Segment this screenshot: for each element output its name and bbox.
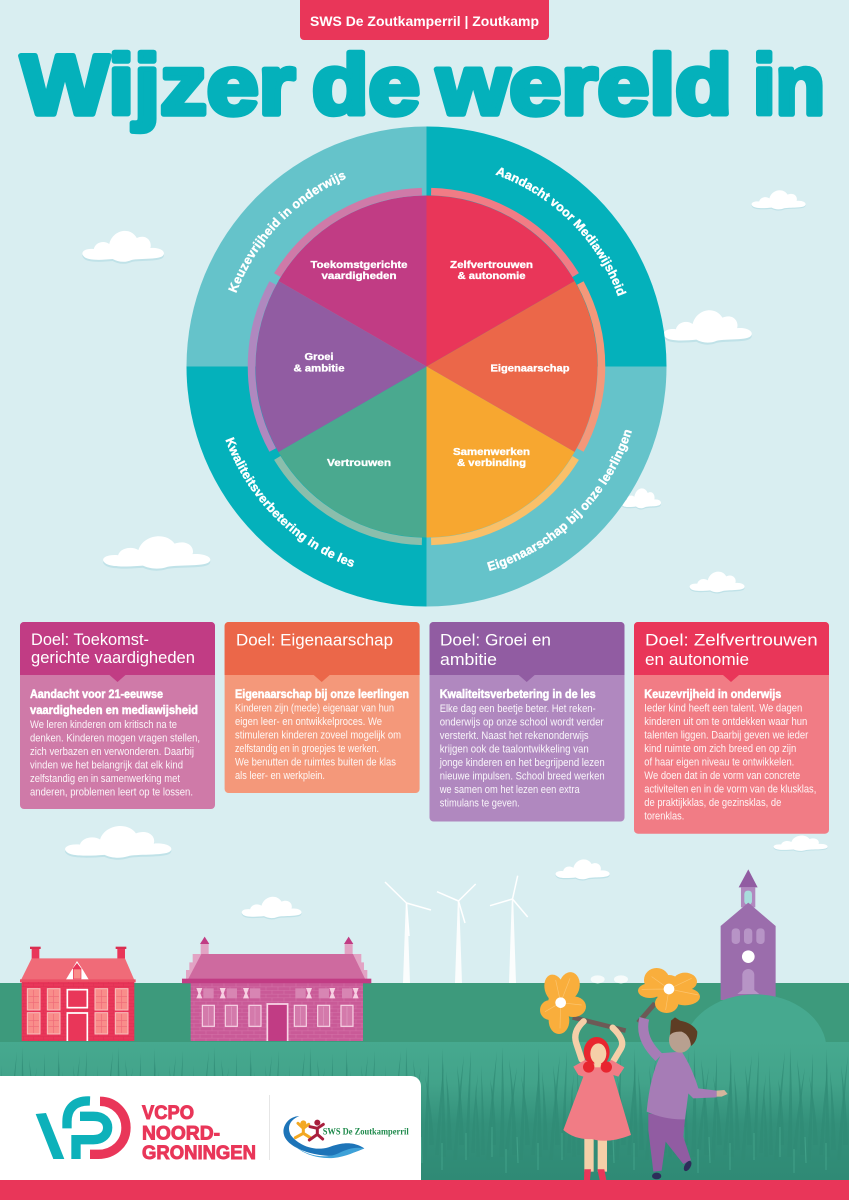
- card: Zelfvertrouwen en autonomie: Keuzevrijheid in onderwijs: [644, 689, 781, 701]
- foreground field with grass: [0, 1042, 849, 1180]
- card: Toekomstgerichte vaardigheden: Doel: Toekomst-: [31, 631, 149, 649]
- logo: VCPO Noord-Groningen: [36, 1101, 256, 1164]
- segment: Groei & ambitie: Groei: [304, 351, 334, 363]
- logo: SWS De Zoutkamperril: [283, 1116, 409, 1158]
- clouds: [65, 190, 828, 919]
- outer ring: Kwaliteitsverbetering in de les: [186, 366, 426, 606]
- outer ring: Aandacht voor Mediawijsheid: [426, 126, 666, 366]
- card: Zelfvertrouwen en autonomie: kinderen uit om te ontdekken waar hun: [644, 716, 807, 728]
- logo: VCPO Noord-Groningen: VCPO: [142, 1103, 194, 1124]
- segment: Eigenaarschap: Eigenaarschap: [490, 362, 570, 374]
- card: Groei en ambitie: Kwaliteitsverbetering in de les: [440, 689, 596, 701]
- back land: [0, 983, 849, 1045]
- outer ring: Aandacht voor Mediawijsheid: Aandacht voor Mediawijsheid: [495, 167, 627, 296]
- card: Groei en ambitie: we samen om het lezen een extra: [439, 784, 580, 796]
- card: Eigenaarschap: [225, 622, 420, 793]
- card: Zelfvertrouwen en autonomie: We doen dat in de vorm van concrete: [644, 770, 800, 782]
- segment: Zelfvertrouwen: Zelfvertrouwen: [450, 259, 533, 271]
- card: Toekomstgerichte vaardigheden: zich verbazen en verwonderen. Daarbij: [30, 746, 194, 758]
- card: Zelfvertrouwen en autonomie: [634, 622, 829, 834]
- card: Groei en ambitie: nieuwe impulsen. School breed werken: [440, 770, 605, 782]
- white logo panel: [0, 1076, 421, 1180]
- segment: Eigenaarschap: [426, 281, 602, 452]
- outer ring: Keuzevrijheid in onderwijs: Keuzevrijheid in onderwijs: [228, 172, 346, 293]
- outer ring: Eigenaarschap bij onze leerlingen: Eigenaarschap bij onze leerlingen: [487, 430, 632, 572]
- logo: SWS De Zoutkamperril: SWS De Zoutkamperril: [323, 1126, 409, 1136]
- title: wereld: [436, 38, 732, 132]
- card: Zelfvertrouwen en autonomie: en autonomie: [645, 651, 749, 669]
- card: Groei en ambitie: onderwijs op onze school wordt verder: [440, 716, 604, 728]
- card: Toekomstgerichte vaardigheden: [20, 622, 215, 809]
- wind turbines: [385, 876, 528, 983]
- logo: VCPO Noord-Groningen: NOORD-: [142, 1123, 220, 1144]
- red manor house: [20, 947, 136, 1041]
- segment: Vertrouwen: [277, 366, 426, 541]
- top label: SWS De Zoutkamperril | Zoutkamp: [310, 13, 539, 29]
- segment: Toekomstgerichte vaardigheden: vaardigheden: [322, 270, 396, 282]
- segment: Vertrouwen: Vertrouwen: [327, 457, 391, 469]
- card: Groei en ambitie: [430, 622, 624, 822]
- segment: Groei & ambitie: [251, 281, 426, 452]
- card: Groei en ambitie: krijgen ook de taalontwikkeling van: [440, 744, 589, 756]
- children holding flowers: [540, 968, 728, 1180]
- card: Groei en ambitie: ambitie: [440, 651, 497, 669]
- church on a hill: [683, 869, 827, 1106]
- title: in: [753, 38, 825, 132]
- card: Toekomstgerichte vaardigheden: vinden we het belangrijk dat elk kind: [30, 760, 183, 772]
- card: Eigenaarschap: zelfstandig en in groepjes te werken.: [235, 743, 379, 755]
- card: Zelfvertrouwen en autonomie: Doel: Zelfvertrouwen: [645, 632, 818, 650]
- title: de: [312, 38, 420, 132]
- card: Eigenaarschap: stimuleren kinderen zoveel mogelijk om: [235, 730, 401, 742]
- boy with flower: [638, 968, 728, 1179]
- card: Eigenaarschap: eigen leer- en ontwikkelproces. We: [235, 716, 382, 728]
- segment: Groei & ambitie: & ambitie: [294, 362, 345, 374]
- card: Groei en ambitie: stimulans te geven.: [440, 798, 520, 810]
- card: Toekomstgerichte vaardigheden: vaardigheden en mediawijsheid: [30, 705, 198, 717]
- card: Groei en ambitie: jonge kinderen en het begrijpend lezen: [439, 757, 605, 769]
- card: Toekomstgerichte vaardigheden: gerichte vaardigheden: [31, 649, 195, 667]
- card: Groei en ambitie: Elke dag een beetje beter. Het reken-: [440, 703, 596, 715]
- sheep: [591, 975, 628, 983]
- card: Toekomstgerichte vaardigheden: We leren kinderen om kritisch na te: [30, 719, 177, 731]
- pink manor house: [182, 937, 371, 1041]
- card: Toekomstgerichte vaardigheden: zelfstandig en in samenwerking met: [30, 773, 180, 785]
- segment: Toekomstgerichte vaardigheden: Toekomstgerichte: [310, 259, 408, 271]
- card: Zelfvertrouwen en autonomie: talenten liggen. Daarbij geven we ieder: [644, 730, 809, 742]
- card: Groei en ambitie: versterkt. Naast het rekenonderwijs: [440, 730, 589, 742]
- wheel diagram: [186, 126, 666, 606]
- card: Zelfvertrouwen en autonomie: activiteiten en in de vorm van de klusklas,: [644, 784, 816, 796]
- outer ring: Keuzevrijheid in onderwijs: [186, 126, 426, 366]
- card: Zelfvertrouwen en autonomie: of haar eigen niveau te ontwikkelen.: [644, 757, 794, 769]
- title: [21, 38, 825, 132]
- segment: Toekomstgerichte vaardigheden: [277, 192, 426, 366]
- card: Eigenaarschap: Kinderen zijn (mede) eigenaar van hun: [235, 703, 394, 715]
- top label: [300, 0, 549, 40]
- segment: Samenwerken: Samenwerken: [453, 446, 530, 458]
- card: Zelfvertrouwen en autonomie: Ieder kind heeft een talent. We dagen: [644, 703, 802, 715]
- segment: Zelfvertrouwen: & autonomie: [458, 270, 526, 282]
- segment: Samenwerken: & verbinding: [457, 457, 526, 469]
- card: Groei en ambitie: Doel: Groei en: [440, 632, 551, 650]
- segment: Zelfvertrouwen: [426, 192, 576, 366]
- logo: VCPO Noord-Groningen: GRONINGEN: [142, 1143, 256, 1164]
- girl with flower: [540, 970, 631, 1180]
- card: Eigenaarschap: We benutten de ruimtes buiten de klas: [235, 757, 396, 769]
- card: Zelfvertrouwen en autonomie: torenklas.: [644, 811, 684, 823]
- card: Toekomstgerichte vaardigheden: denken. Kinderen mogen vragen stellen,: [30, 732, 200, 744]
- title: Wijzer: [21, 38, 295, 132]
- segment: Samenwerken: [426, 366, 576, 541]
- card: Toekomstgerichte vaardigheden: Aandacht voor 21-eeuwse: [30, 689, 163, 701]
- card: Eigenaarschap: als leer- en werkplein.: [235, 770, 325, 782]
- card: Zelfvertrouwen en autonomie: de praktijkklas, de gezinsklas, de: [644, 797, 781, 809]
- card: Toekomstgerichte vaardigheden: anderen, problemen leert op te lossen.: [30, 786, 193, 798]
- card: Eigenaarschap: Eigenaarschap bij onze leerlingen: [235, 689, 409, 701]
- card: Eigenaarschap: Doel: Eigenaarschap: [236, 632, 393, 650]
- card: Zelfvertrouwen en autonomie: kind ruimte om zich breed en op zijn: [644, 743, 796, 755]
- outer ring: Kwaliteitsverbetering in de les: Kwaliteitsverbetering in de les: [225, 437, 354, 567]
- bottom bar: [0, 1180, 849, 1200]
- outer ring: Eigenaarschap bij onze leerlingen: [426, 366, 666, 606]
